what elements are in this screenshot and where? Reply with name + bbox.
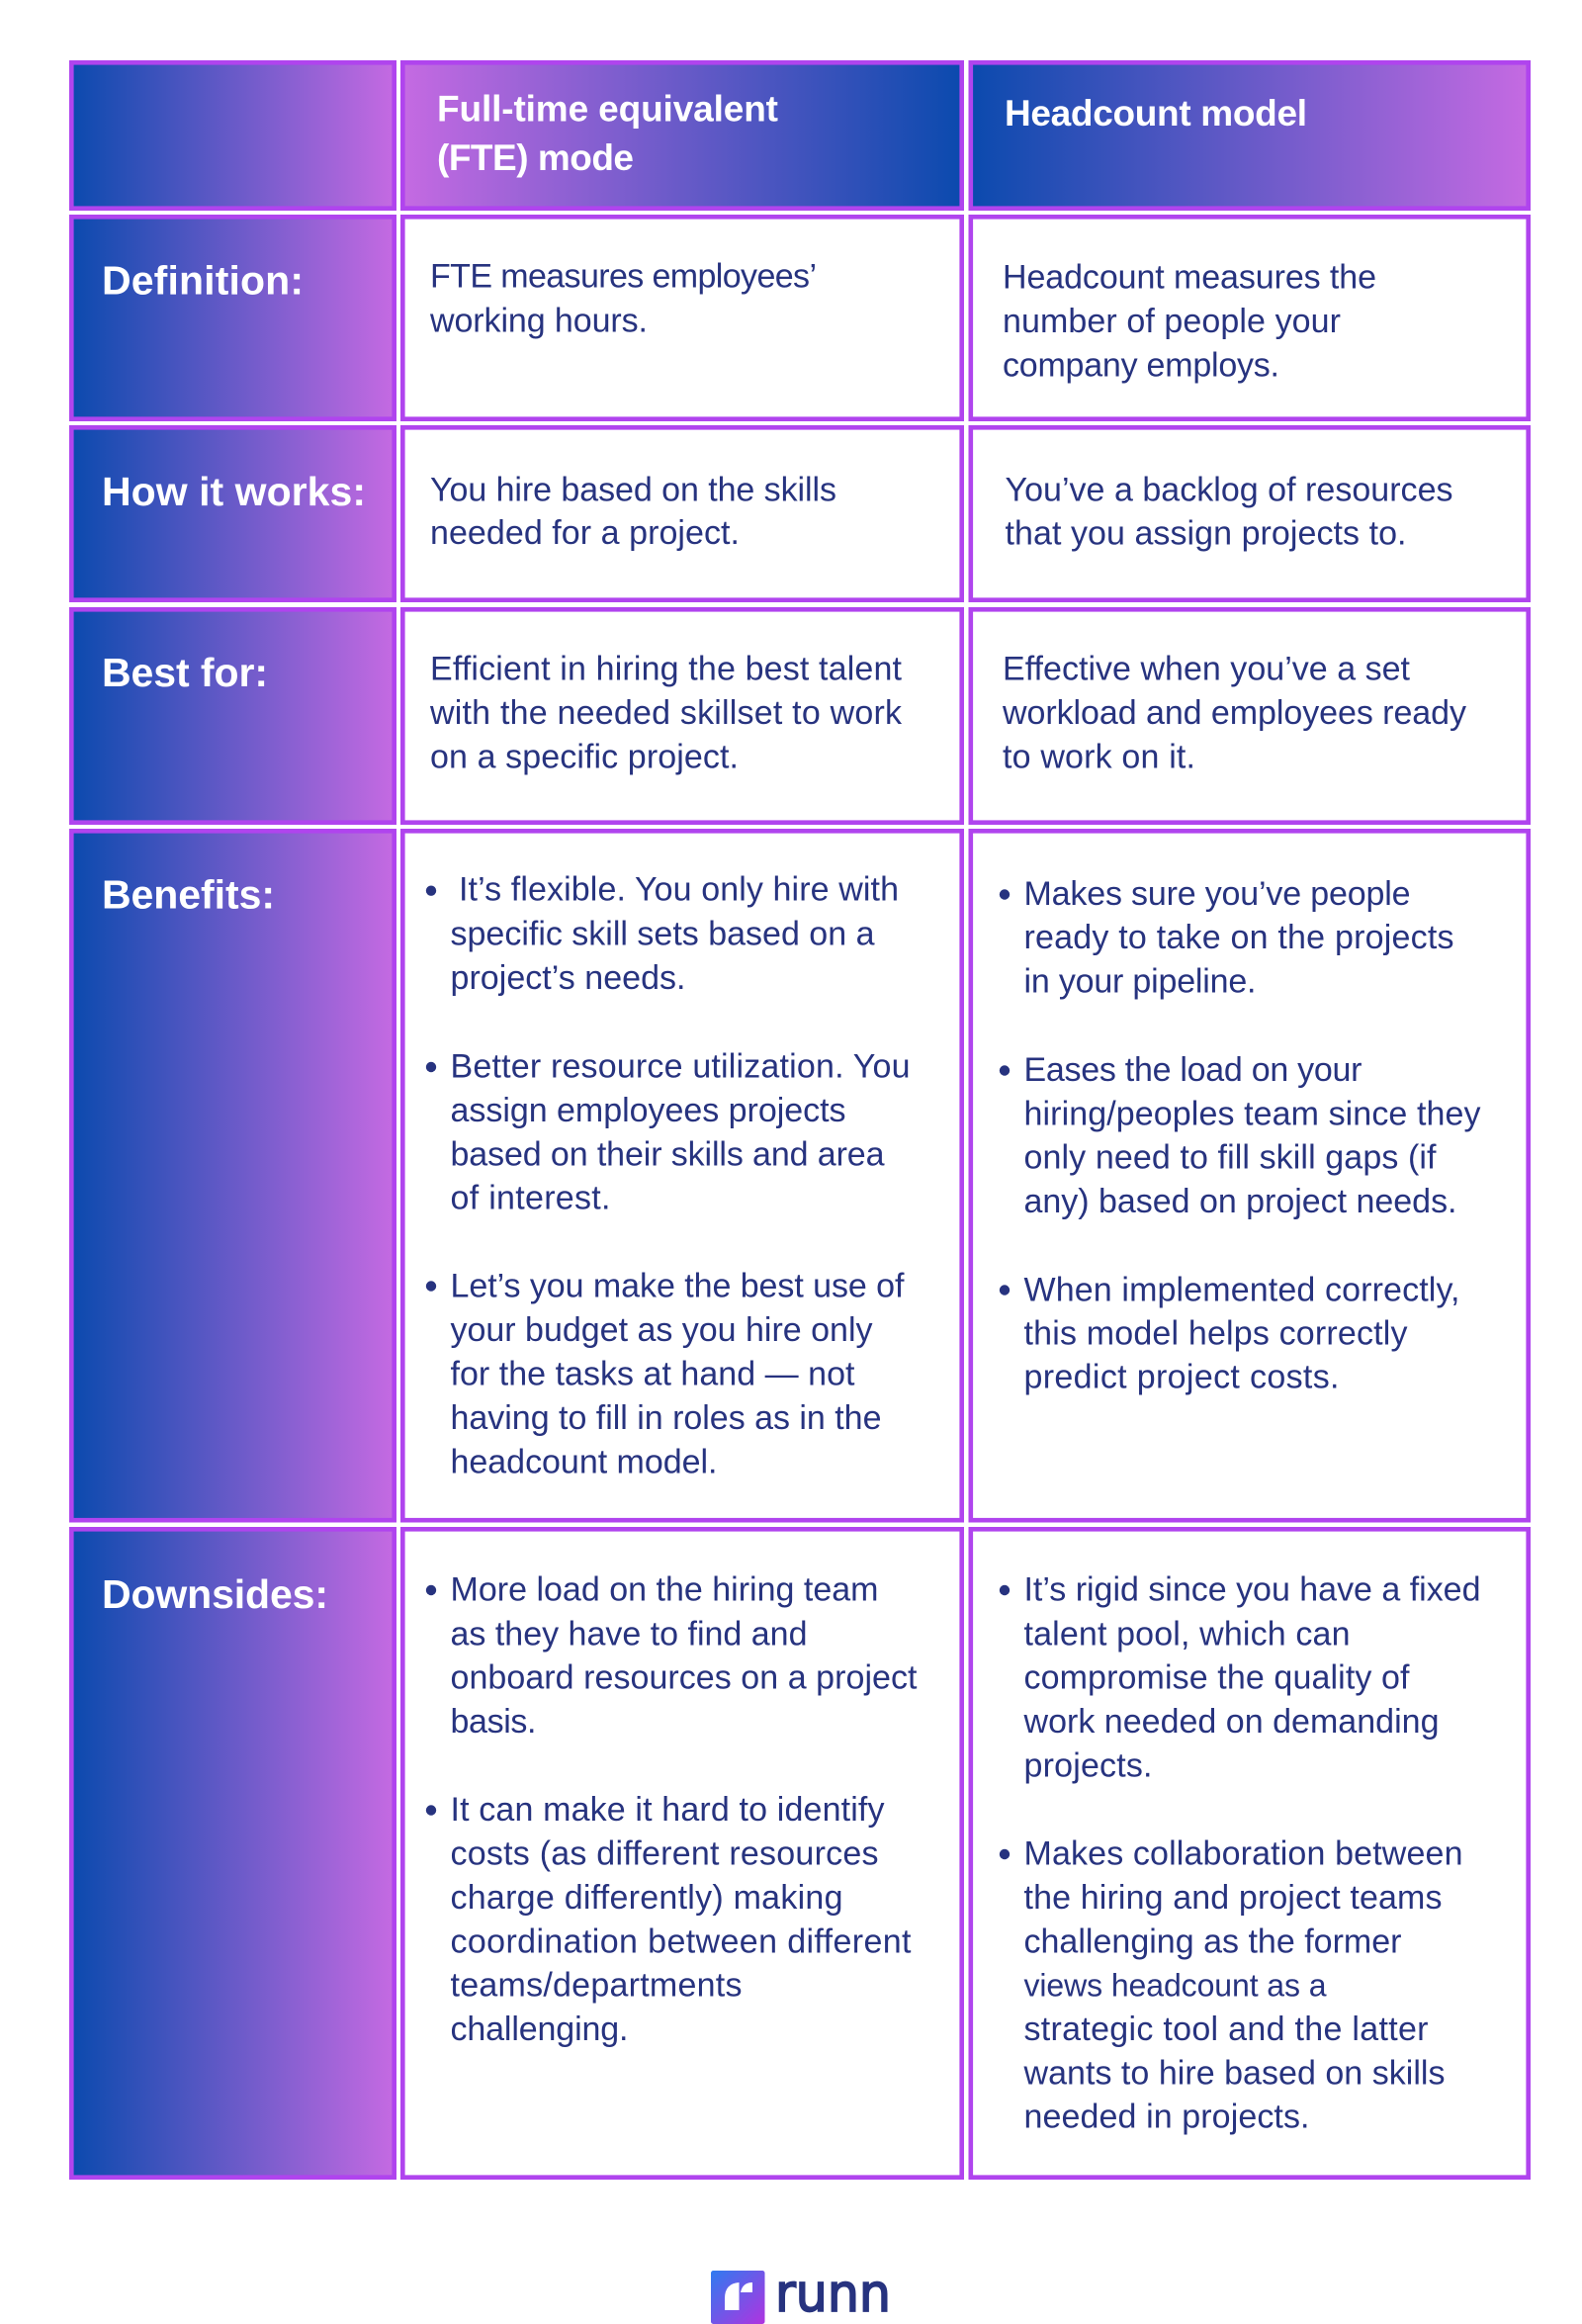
column heading: Headcount model: Headcount model	[1005, 93, 1307, 134]
Headcount downsides list: work needed on demanding	[1022, 1703, 1440, 1741]
FTE downsides list	[402, 1529, 962, 2178]
row label: Definition	[71, 217, 395, 419]
row: Benefits	[71, 831, 1529, 1520]
FTE benefits list: for the tasks at hand — not	[451, 1356, 855, 1393]
FTE downsides list: It can make it hard to identify	[451, 1791, 884, 1829]
Headcount benefits list: Eases the load on your	[1024, 1051, 1362, 1089]
Headcount downsides list: Makes collaboration between	[1024, 1835, 1463, 1873]
Headcount benefits list	[971, 831, 1529, 1520]
FTE benefits list: having to fill in roles as in the	[451, 1399, 882, 1437]
FTE downsides list: charge differently) making	[451, 1879, 842, 1917]
Headcount best for cell	[971, 609, 1529, 823]
FTE best for cell: with the needed skillset to work	[429, 694, 903, 732]
FTE best for cell: Efficient in hiring the best talent	[430, 651, 903, 688]
row: How it works	[71, 427, 1529, 600]
Headcount downsides list: compromise the quality of	[1024, 1659, 1410, 1697]
FTE definition cell	[402, 217, 962, 419]
Headcount how it works cell: You’ve a backlog of resources	[1005, 471, 1453, 508]
Headcount definition cell: Headcount measures the	[1003, 259, 1376, 297]
Headcount definition cell: number of people your	[1003, 303, 1341, 340]
row label: Best for: Best for:	[102, 650, 268, 695]
header row	[71, 62, 1529, 209]
logo: runn	[711, 2264, 891, 2324]
column heading: FTE model: (FTE) mode	[437, 137, 634, 178]
Headcount benefits list: this model helps correctly	[1024, 1315, 1408, 1353]
FTE benefits list	[402, 831, 962, 1520]
row label: Downsides	[71, 1529, 395, 2178]
Headcount benefits list: Makes sure you’ve people	[1024, 875, 1410, 913]
column heading: FTE model: Full-time equivalent	[437, 89, 778, 129]
Headcount benefits list: any) based on project needs.	[1024, 1183, 1457, 1220]
Headcount downsides list: talent pool, which can	[1024, 1615, 1351, 1653]
FTE benefits list: project’s needs.	[451, 959, 686, 997]
Headcount downsides list: the hiring and project teams	[1024, 1879, 1442, 1917]
FTE benefits list: headcount model.	[451, 1444, 718, 1481]
row: Best for	[71, 609, 1529, 823]
row label: How it works: How it works:	[102, 469, 366, 514]
wordmark: runn	[775, 2264, 891, 2324]
Headcount benefits list: predict project costs.	[1024, 1359, 1339, 1396]
row: Downsides	[71, 1529, 1529, 2178]
row label: Definition: Definition:	[102, 257, 304, 303]
row label: Benefits: Benefits:	[102, 872, 275, 918]
FTE downsides list: teams/departments	[451, 1967, 742, 2005]
FTE how it works cell	[402, 427, 962, 600]
Headcount best for cell: workload and employees ready	[1002, 694, 1466, 732]
FTE definition cell: working hours.	[429, 302, 648, 339]
Headcount downsides list: needed in projects.	[1024, 2099, 1309, 2136]
Headcount downsides list: It’s rigid since you have a fixed	[1024, 1571, 1481, 1609]
FTE downsides list: basis.	[451, 1703, 536, 1741]
FTE benefits list: Let’s you make the best use of	[451, 1268, 905, 1305]
Headcount benefits list: When implemented correctly,	[1024, 1272, 1459, 1309]
Headcount downsides list: challenging as the former	[1024, 1923, 1402, 1961]
FTE downsides list: costs (as different resources	[451, 1835, 878, 1873]
column heading: FTE model	[402, 62, 962, 209]
row label: Best for	[71, 609, 395, 823]
Headcount downsides list: projects.	[1024, 1747, 1153, 1785]
FTE benefits list: specific skill sets based on a	[451, 916, 875, 953]
Headcount definition cell	[971, 217, 1529, 419]
column heading: Headcount model	[971, 62, 1529, 209]
FTE benefits list: based on their skills and area	[451, 1136, 885, 1174]
Headcount downsides list	[971, 1529, 1529, 2178]
FTE best for cell: on a specific project.	[430, 739, 739, 776]
empty header cell	[71, 62, 395, 209]
Headcount benefits list: only need to fill skill gaps (if	[1024, 1139, 1437, 1177]
row: Definition	[71, 217, 1529, 419]
FTE benefits list: Better resource utilization. You	[451, 1048, 910, 1086]
FTE how it works cell: You hire based on the skills	[430, 471, 836, 508]
Headcount how it works cell	[971, 427, 1529, 600]
Headcount how it works cell: that you assign projects to.	[1005, 515, 1406, 553]
row label: How it works	[71, 427, 395, 600]
Headcount best for cell: Effective when you’ve a set	[1003, 651, 1411, 688]
Headcount benefits list: in your pipeline.	[1024, 963, 1256, 1001]
row label: Benefits	[71, 831, 395, 1520]
icon: runn logo mark	[711, 2271, 765, 2324]
Headcount best for cell: to work on it.	[1003, 739, 1195, 776]
FTE how it works cell: needed for a project.	[430, 514, 740, 552]
FTE benefits list: assign employees projects	[451, 1092, 846, 1129]
FTE benefits list: It’s flexible. You only hire with	[459, 871, 899, 909]
Headcount benefits list: ready to take on the projects	[1024, 919, 1453, 956]
FTE downsides list: More load on the hiring team	[451, 1571, 878, 1609]
Headcount definition cell: company employs.	[1003, 346, 1279, 384]
row label: Downsides: Downsides:	[102, 1571, 328, 1617]
FTE definition cell: FTE measures employees’	[430, 258, 817, 296]
FTE downsides list: as they have to find and	[451, 1615, 807, 1653]
FTE benefits list: of interest.	[451, 1180, 611, 1217]
FTE benefits list: your budget as you hire only	[451, 1311, 872, 1349]
Headcount downsides list: strategic tool and the latter	[1024, 2011, 1428, 2048]
Headcount downsides list: views headcount as a	[1024, 1968, 1327, 2004]
Headcount downsides list: wants to hire based on skills	[1022, 2055, 1446, 2093]
FTE downsides list: onboard resources on a project	[451, 1659, 918, 1697]
FTE downsides list: challenging.	[451, 2011, 629, 2048]
Headcount benefits list: hiring/peoples team since they	[1024, 1096, 1481, 1133]
FTE downsides list: coordination between different	[451, 1923, 912, 1961]
FTE best for cell	[402, 609, 962, 823]
